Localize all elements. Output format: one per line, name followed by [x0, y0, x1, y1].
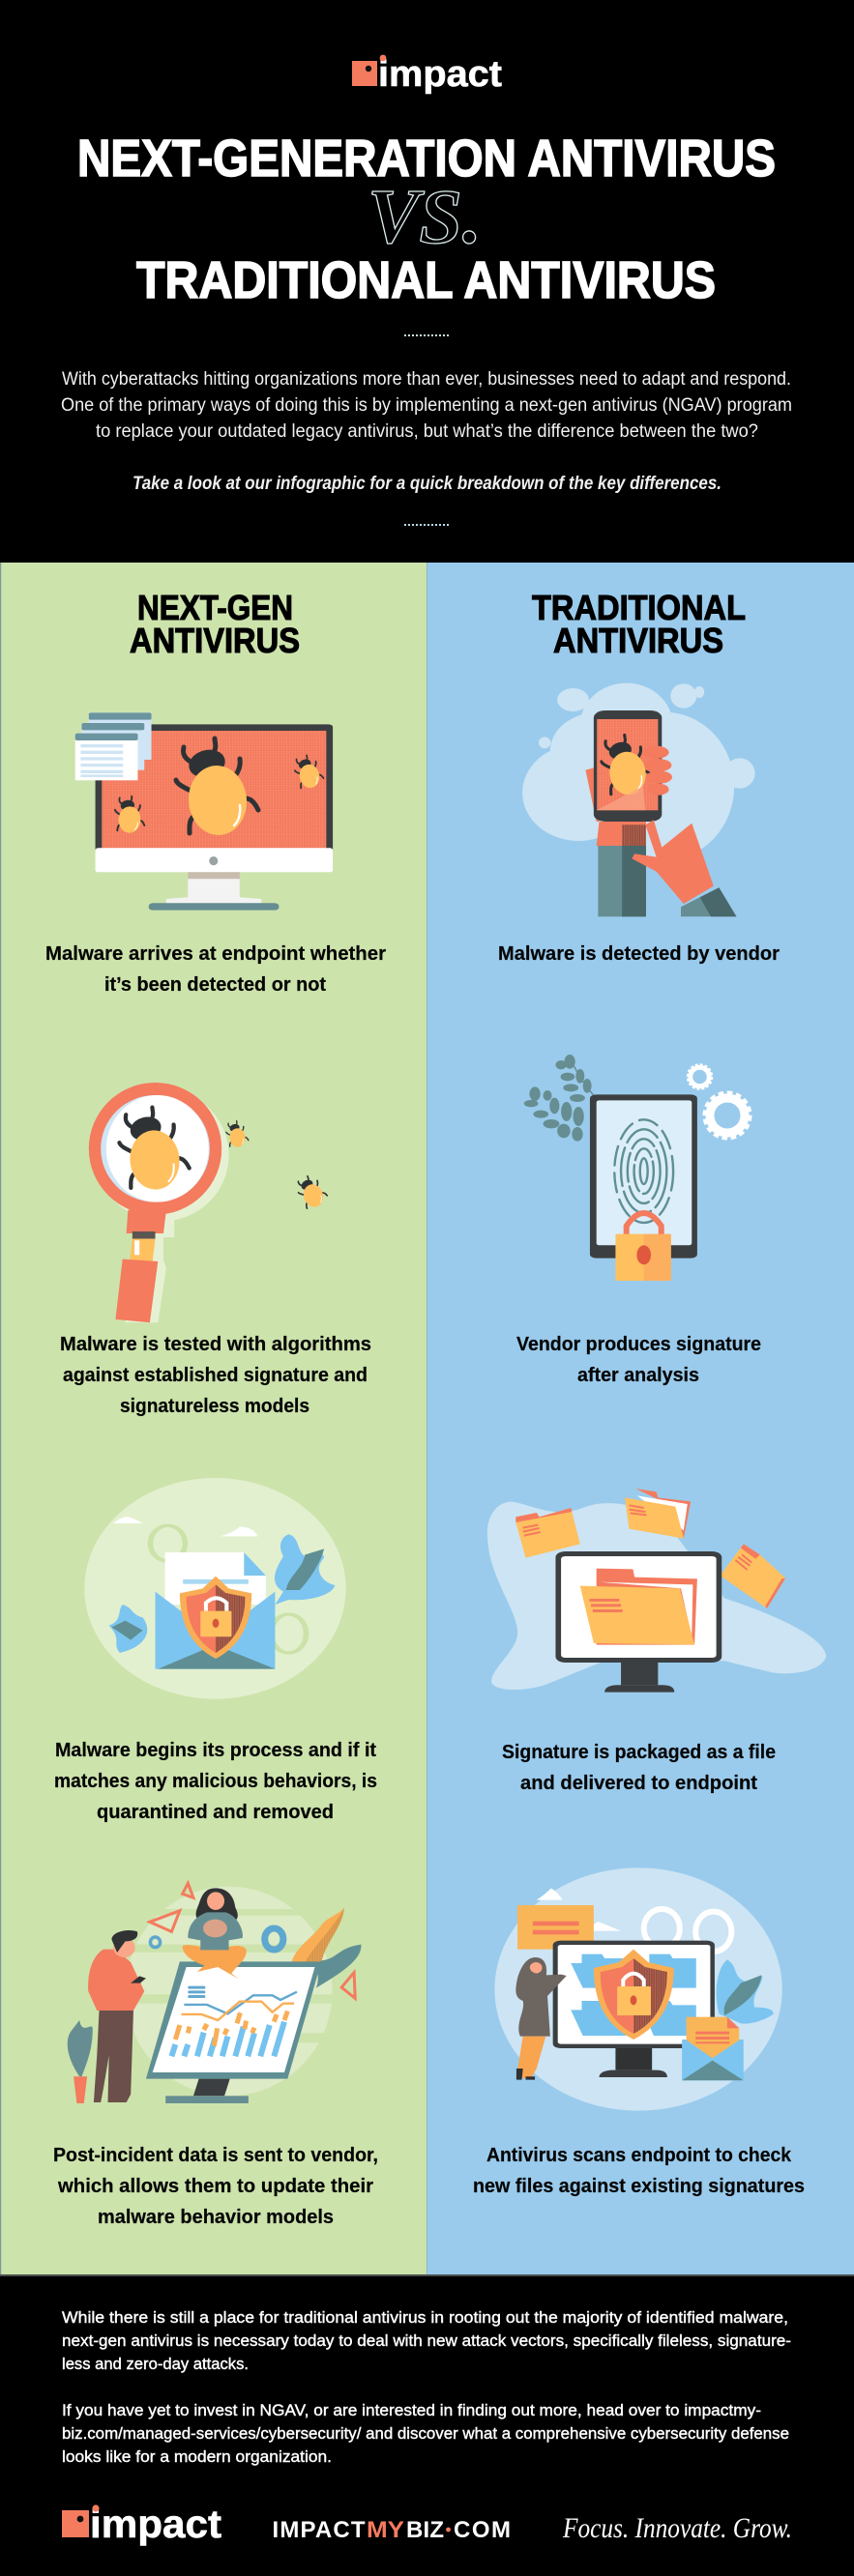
text: step 1 traditional: Malware is detected by vendor [498, 943, 780, 965]
intro text [61, 369, 792, 494]
footer text: next-gen antivirus is necessary today to deal with new attack vectors, specifically fileless, signature- [62, 2331, 791, 2350]
intro text: to replace your outdated legacy antivirus, but what’s the difference between the two? [96, 421, 758, 442]
panel: traditional antivirus [427, 563, 854, 2274]
footer website address: IMPACT [273, 2517, 366, 2543]
text: step 2 traditional: after analysis [577, 1365, 699, 1386]
footer logo: impact [90, 2502, 221, 2546]
icon: monitor with folders [487, 1489, 826, 1693]
intro text: With cyberattacks hitting organizations more than ever, businesses need to adapt and respond. [62, 369, 791, 390]
intro text: Take a look at our infographic for a quick breakdown of the key differences. [133, 474, 721, 494]
text: step 4 next-gen: malware behavior models [98, 2207, 334, 2228]
heading: next-gen antivirus [130, 588, 300, 660]
text: step 4 traditional: new files against existing signatures [473, 2176, 805, 2197]
footer website address: MY [367, 2517, 404, 2543]
text: step 2 next-gen: Malware is tested with algorithms [60, 1334, 371, 1355]
text: step 1 next-gen: Malware arrives at endpoint whether [45, 943, 386, 965]
text: step 2 traditional: Vendor produces signature [516, 1334, 761, 1355]
footer text: While there is still a place for traditional antivirus in rooting out the majority of identified malware, [62, 2308, 788, 2327]
text: step 3 traditional [502, 1742, 776, 1794]
footer text [62, 2308, 791, 2466]
text: step 4 next-gen: which allows them to update their [57, 2176, 373, 2197]
text: step 2 traditional [516, 1334, 761, 1386]
icon: woman beside monitor with shield [494, 1867, 782, 2111]
panel: next-gen antivirus [0, 563, 427, 2274]
intro text: One of the primary ways of doing this is by implementing a next-gen antivirus (NGAV) program [61, 395, 792, 416]
heading: traditional antivirus [532, 588, 746, 660]
text: step 4 next-gen [53, 2145, 378, 2228]
header logo: impact [378, 54, 502, 95]
heading: traditional antivirus: ANTIVIRUS [553, 621, 723, 660]
text: step 3 traditional: Signature is packaged as a file [502, 1742, 776, 1763]
text: step 4 traditional [473, 2145, 805, 2197]
text: step 2 next-gen: against established signature and [63, 1365, 368, 1386]
text: step 3 next-gen: matches any malicious behaviors, is [54, 1771, 377, 1792]
text: step 3 next-gen: Malware begins its process and if it [55, 1740, 376, 1761]
footer tagline: Focus. Innovate. Grow. [562, 2512, 792, 2544]
footer text: less and zero-day attacks. [62, 2355, 249, 2373]
icon: tablet fingerprint with padlock [524, 1055, 750, 1281]
text: step 4 next-gen: Post-incident data is sent to vendor, [53, 2145, 378, 2166]
footer text: If you have yet to invest in NGAV, or are interested in finding out more, head over to impactmy- [62, 2401, 761, 2419]
text: step 2 next-gen [60, 1334, 371, 1417]
footer website address: BIZ [406, 2517, 444, 2543]
text: step 3 next-gen: quarantined and removed [97, 1802, 334, 1823]
icon: envelope with shield [84, 1478, 346, 1699]
title [77, 130, 776, 309]
title: VS. [368, 175, 482, 260]
text: step 1 next-gen [45, 943, 386, 996]
footer text: looks like for a modern organization. [62, 2447, 332, 2466]
heading: traditional antivirus: TRADITIONAL [532, 588, 746, 627]
icon: people analysing chart on a monitor [68, 1883, 361, 2103]
icon: infected desktop monitor [75, 712, 333, 911]
text: step 2 next-gen: signatureless models [120, 1396, 309, 1417]
text: step 1 next-gen: it’s been detected or not [104, 974, 326, 996]
icon: magnifying glass with bugs [89, 1083, 330, 1322]
footer text: biz.com/managed-services/cybersecurity/ and discover what a comprehensive cybersecurity defense [62, 2424, 789, 2443]
footer website address [273, 2517, 511, 2543]
footer website address: COM [454, 2517, 511, 2543]
title: TRADITIONAL ANTIVIRUS [136, 251, 716, 309]
text: step 3 traditional: and delivered to endpoint [520, 1773, 757, 1794]
text: step 3 next-gen [54, 1740, 377, 1823]
icon: hands holding phone with bug [522, 683, 755, 916]
heading: next-gen antivirus: ANTIVIRUS [130, 621, 300, 660]
text: step 4 traditional: Antivirus scans endpoint to check [486, 2145, 792, 2166]
heading: next-gen antivirus: NEXT-GEN [137, 588, 293, 627]
title: NEXT-GENERATION ANTIVIRUS [77, 130, 776, 188]
